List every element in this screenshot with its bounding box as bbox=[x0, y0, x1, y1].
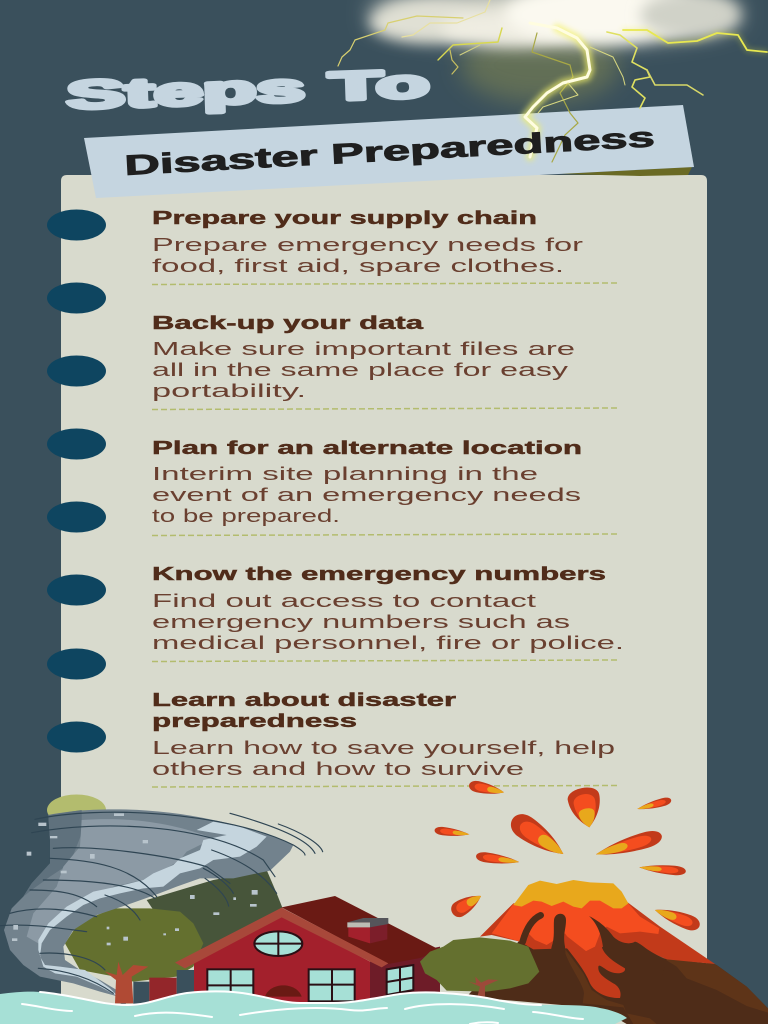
step 4: emergency numbers: emergency numbers such as bbox=[152, 611, 570, 632]
neighbouring shed bbox=[133, 970, 194, 1004]
funnel body bbox=[4, 809, 293, 1012]
step 2 heading: Back-up your data bbox=[152, 313, 425, 333]
tornado scene bbox=[0, 809, 440, 1012]
lighter ridge bbox=[563, 947, 768, 1024]
step 3: alternate location: to be prepared. bbox=[152, 505, 340, 526]
lava drip bbox=[563, 933, 625, 998]
funnel light band bbox=[38, 822, 267, 997]
step 3: alternate location bbox=[152, 438, 617, 536]
lava orange body bbox=[492, 900, 659, 952]
right window bbox=[309, 969, 355, 1001]
step 5: learn preparedness bbox=[152, 690, 617, 787]
title: Steps To: Steps To bbox=[66, 62, 430, 118]
step 3 heading: Plan for an alternate location bbox=[152, 438, 582, 458]
funnel swirl lines bbox=[0, 812, 323, 993]
red house bbox=[175, 896, 440, 1003]
door arch bbox=[265, 985, 302, 997]
flying debris bbox=[12, 813, 258, 997]
roof trim bbox=[175, 908, 388, 968]
step 3 body: Interim site planning in the bbox=[152, 463, 538, 484]
step 2: back-up data: all in the same place for easy bbox=[152, 359, 569, 380]
notebook panel bbox=[61, 175, 707, 1024]
left tree trunk bbox=[105, 962, 148, 1003]
flood water bbox=[0, 991, 627, 1024]
step 1 body: Prepare emergency needs for bbox=[152, 234, 583, 255]
step 4: emergency numbers: medical personnel, fire or police. bbox=[152, 632, 624, 653]
dark rock right of flow bbox=[589, 916, 667, 983]
step 4 body: Find out access to contact bbox=[152, 590, 536, 611]
volcano with lava drops bbox=[434, 779, 768, 1024]
banner shadow bbox=[560, 167, 692, 176]
step 4: emergency numbers bbox=[152, 564, 624, 662]
side window bbox=[387, 965, 413, 995]
step 1 heading: Prepare your supply chain bbox=[152, 208, 537, 228]
lightning bolts bbox=[338, 0, 767, 162]
dark foliage bbox=[147, 870, 283, 953]
storm cloud bbox=[370, 0, 740, 103]
right tree trunk bbox=[468, 977, 498, 997]
right tree bbox=[420, 937, 539, 997]
front wall bbox=[194, 915, 370, 1003]
step 5: learn preparedness: others and how to survive bbox=[152, 758, 524, 779]
step 5 heading: Learn about disaster bbox=[152, 690, 456, 710]
step 1: supply chain bbox=[152, 208, 617, 284]
step 5 body: Learn how to save yourself, help bbox=[152, 737, 615, 758]
funnel mid grey bbox=[27, 819, 213, 943]
step 2: back-up data bbox=[152, 313, 617, 410]
dark finger left bbox=[523, 915, 541, 942]
lava crater top bbox=[513, 880, 628, 908]
step 1: supply chain: food, first aid, spare clothes. bbox=[152, 255, 564, 276]
lava red body bbox=[480, 902, 715, 964]
notebook binding holes bbox=[47, 210, 106, 826]
dark finger centre bbox=[547, 914, 567, 970]
chimney bbox=[347, 918, 388, 943]
step 2: back-up data: portability. bbox=[152, 380, 306, 401]
dark roof bbox=[282, 896, 440, 964]
lava drops bbox=[434, 779, 702, 933]
house side wall bbox=[370, 947, 440, 1003]
left tree canopy bbox=[65, 908, 203, 982]
left window bbox=[207, 969, 253, 1003]
banner bbox=[84, 105, 694, 198]
step 3: alternate location: event of an emergency needs bbox=[152, 484, 581, 505]
step 5: learn preparedness: preparedness bbox=[152, 711, 357, 731]
step 4 heading: Know the emergency numbers bbox=[152, 564, 606, 584]
water crest lines bbox=[22, 991, 583, 1024]
oval attic window bbox=[254, 931, 302, 956]
funnel dark left bbox=[23, 810, 82, 897]
volcano mountain bbox=[467, 913, 768, 1024]
banner text: Disaster Preparedness: Disaster Preparedness bbox=[124, 121, 656, 181]
tornado funnel bbox=[0, 809, 323, 1012]
step 2 body: Make sure important files are bbox=[152, 338, 575, 359]
